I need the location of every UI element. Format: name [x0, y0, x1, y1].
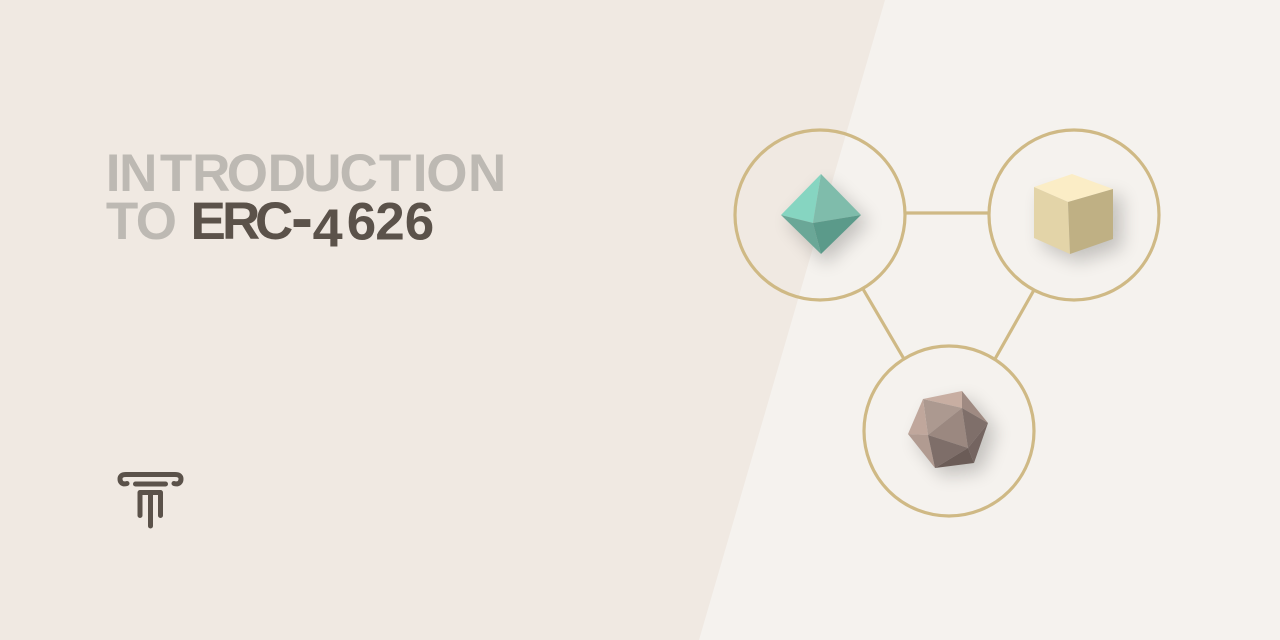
title line 2: -	[291, 180, 313, 254]
circle: top left	[735, 130, 905, 300]
icon: greek column logo	[120, 474, 181, 526]
title	[106, 144, 506, 258]
title line 2: 626	[347, 192, 434, 252]
icon: octahedron	[781, 174, 869, 264]
title line 2: 4	[313, 198, 343, 258]
circle: top right	[989, 130, 1159, 300]
icon: cube	[1034, 174, 1122, 262]
left background panel	[0, 0, 885, 640]
icon: icosahedron	[908, 391, 996, 476]
title line 2	[106, 180, 434, 258]
title line 2: ERC	[190, 192, 293, 251]
title line 1: INTRODUCTION	[106, 144, 506, 203]
circle: bottom	[864, 346, 1034, 516]
title line 2: TO	[106, 192, 177, 251]
network connectors	[863, 213, 1034, 359]
